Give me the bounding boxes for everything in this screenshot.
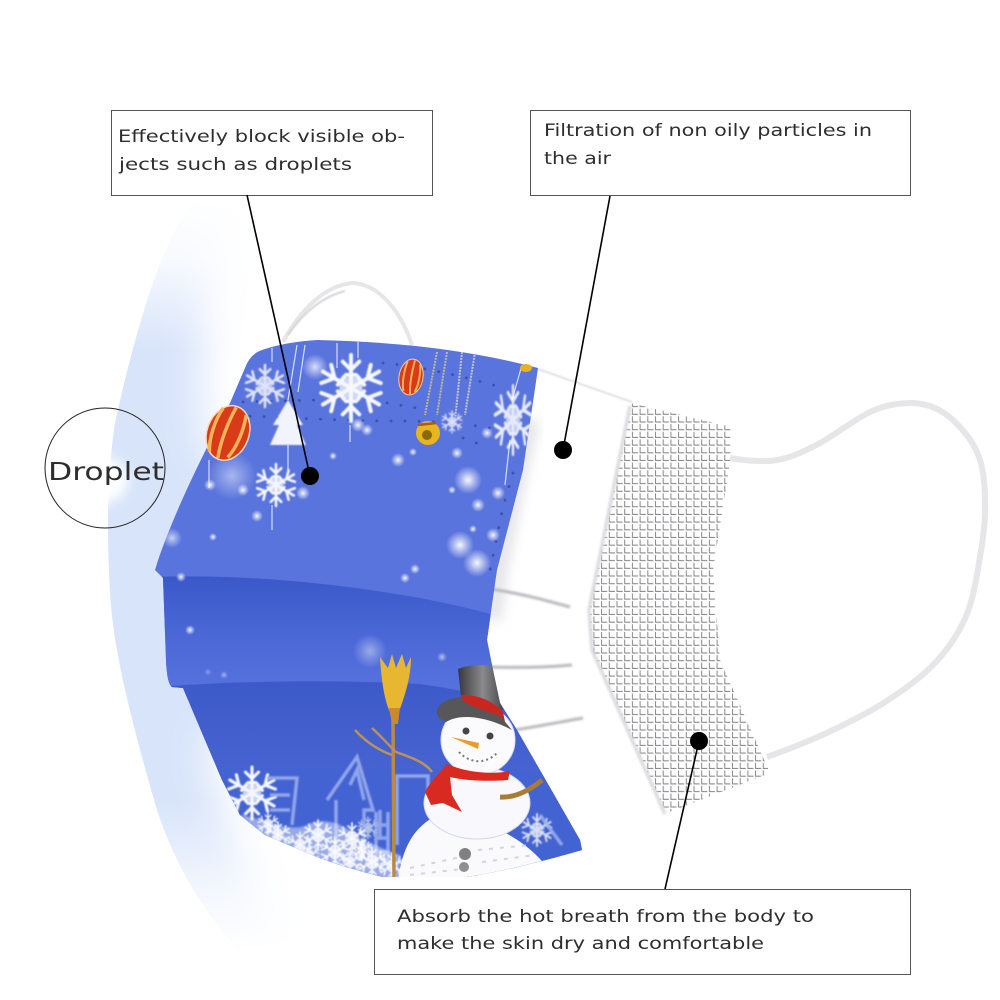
- snowflakes: [229, 355, 551, 846]
- right ear loop: [730, 403, 985, 757]
- callout box: hot breath: make the skin dry and comfortable: [397, 934, 764, 954]
- hat brim: [437, 697, 512, 730]
- coal buttons: [459, 848, 471, 860]
- leader line: breath: [665, 732, 708, 889]
- droplet blob behind label: [56, 454, 128, 506]
- nose: [451, 737, 479, 749]
- white middle layer: [480, 368, 667, 850]
- droplet spray halo: [108, 205, 248, 950]
- callout box: droplets: Effectively block visible ob-: [118, 127, 405, 147]
- arm: [500, 780, 542, 797]
- left ear loop: [283, 283, 412, 345]
- white fir ornament: [270, 400, 306, 445]
- callout box: particles: the air: [544, 149, 611, 169]
- bottom snow drift: [240, 815, 400, 885]
- blue printed outer mask: [155, 340, 582, 877]
- callout box: particles: Filtration of non oily particles in: [544, 121, 872, 141]
- scarf: [425, 764, 510, 812]
- hanging threads: [209, 342, 522, 530]
- folds: [150, 576, 510, 700]
- leader line: particles: [554, 196, 610, 459]
- pleat shadows: [488, 589, 583, 731]
- town outline: [267, 757, 562, 868]
- stitching on body: [410, 845, 535, 875]
- droplet label: [45, 408, 165, 528]
- head: [440, 714, 516, 773]
- callout box: hot breath: [374, 890, 910, 974]
- broom: [355, 654, 432, 878]
- droplet label: Droplet: [48, 457, 164, 486]
- snow glows: [162, 354, 505, 679]
- callout box: droplets: [112, 110, 432, 196]
- callout box: hot breath: Absorb the hot breath from the body to: [397, 907, 814, 927]
- bottom snow flakes: [258, 813, 404, 879]
- eyes: [462, 728, 470, 734]
- ornament: large red bauble: [199, 400, 257, 466]
- leader line: droplets: [247, 195, 319, 485]
- stitching dots: [243, 363, 513, 570]
- lower body: [398, 818, 545, 880]
- ornament: small red bauble: [396, 357, 426, 397]
- callout box: droplets: jects such as droplets: [118, 155, 352, 175]
- hat crown: [458, 665, 503, 710]
- gold chains: [425, 352, 475, 420]
- ornament: small gold tip: [520, 364, 532, 372]
- callout box: particles: [530, 110, 910, 196]
- hat band: [461, 695, 505, 722]
- ornament: gold bell: [416, 421, 440, 445]
- mesh filter layer: [589, 403, 770, 813]
- snowman: [398, 665, 545, 880]
- smile: [459, 752, 497, 761]
- mid body: [424, 767, 530, 839]
